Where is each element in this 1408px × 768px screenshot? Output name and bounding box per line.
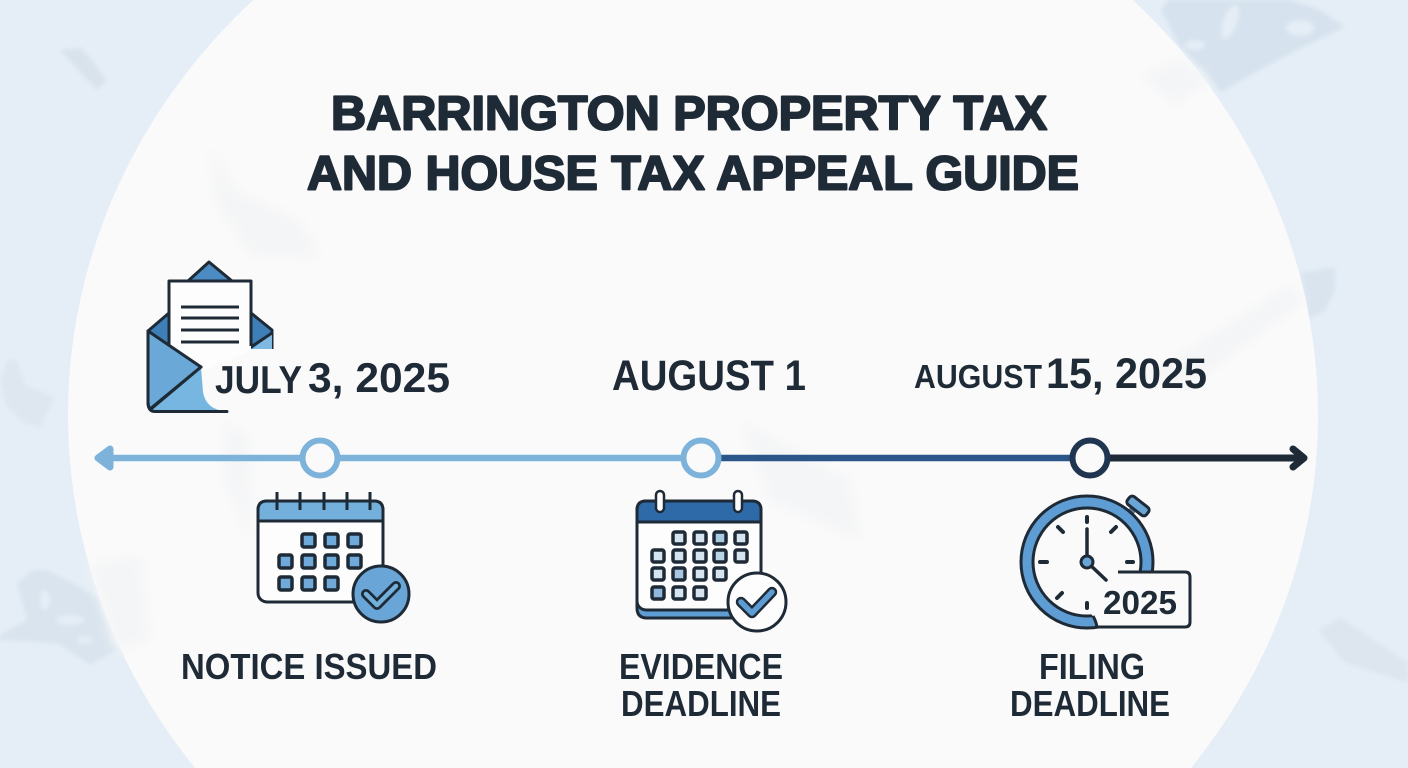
title: AND HOUSE TAX APPEAL GUIDE <box>307 148 1079 200</box>
milestone marker: August 15 <box>1072 440 1108 476</box>
date: July 3, 2025: JULY <box>215 359 302 402</box>
tag text: 2025: 2025 <box>1103 584 1177 621</box>
date: July 3, 2025: 3, 2025 <box>308 354 450 401</box>
timeline segment: navy <box>700 455 1090 461</box>
icon: stopwatch with 2025 tag <box>1021 495 1190 628</box>
milestone marker: August 1 <box>684 440 718 476</box>
date: July 3, 2025 <box>215 354 450 402</box>
milestone marker: July 3 <box>302 440 338 476</box>
title <box>307 88 1079 200</box>
label: evidence deadline: EVIDENCE <box>619 646 783 687</box>
title: BARRINGTON PROPERTY TAX <box>331 88 1047 140</box>
label: filing deadline <box>1010 646 1170 724</box>
timeline segment: dark with right arrow <box>1090 449 1304 467</box>
label: filing deadline: DEADLINE <box>1010 683 1170 724</box>
date: August 15, 2025: 15, 2025 <box>1046 350 1207 398</box>
date: August 1: AUGUST 1 <box>612 352 806 400</box>
date: August 15, 2025 <box>914 350 1207 398</box>
label: notice issued: NOTICE ISSUED <box>181 646 437 687</box>
date: August 15, 2025: AUGUST <box>914 358 1042 395</box>
label: evidence deadline <box>619 646 783 724</box>
timeline <box>98 440 1304 476</box>
label: filing deadline: FILING <box>1039 646 1145 687</box>
icon: calendar with check (notice issued) <box>258 492 409 622</box>
timeline segment: light blue with left arrow <box>98 449 700 467</box>
label: evidence deadline: DEADLINE <box>621 683 781 724</box>
faint circle texture <box>90 60 1305 650</box>
icon: open envelope with letter <box>148 262 272 412</box>
icon: calendar with check (evidence deadline) <box>637 491 786 631</box>
